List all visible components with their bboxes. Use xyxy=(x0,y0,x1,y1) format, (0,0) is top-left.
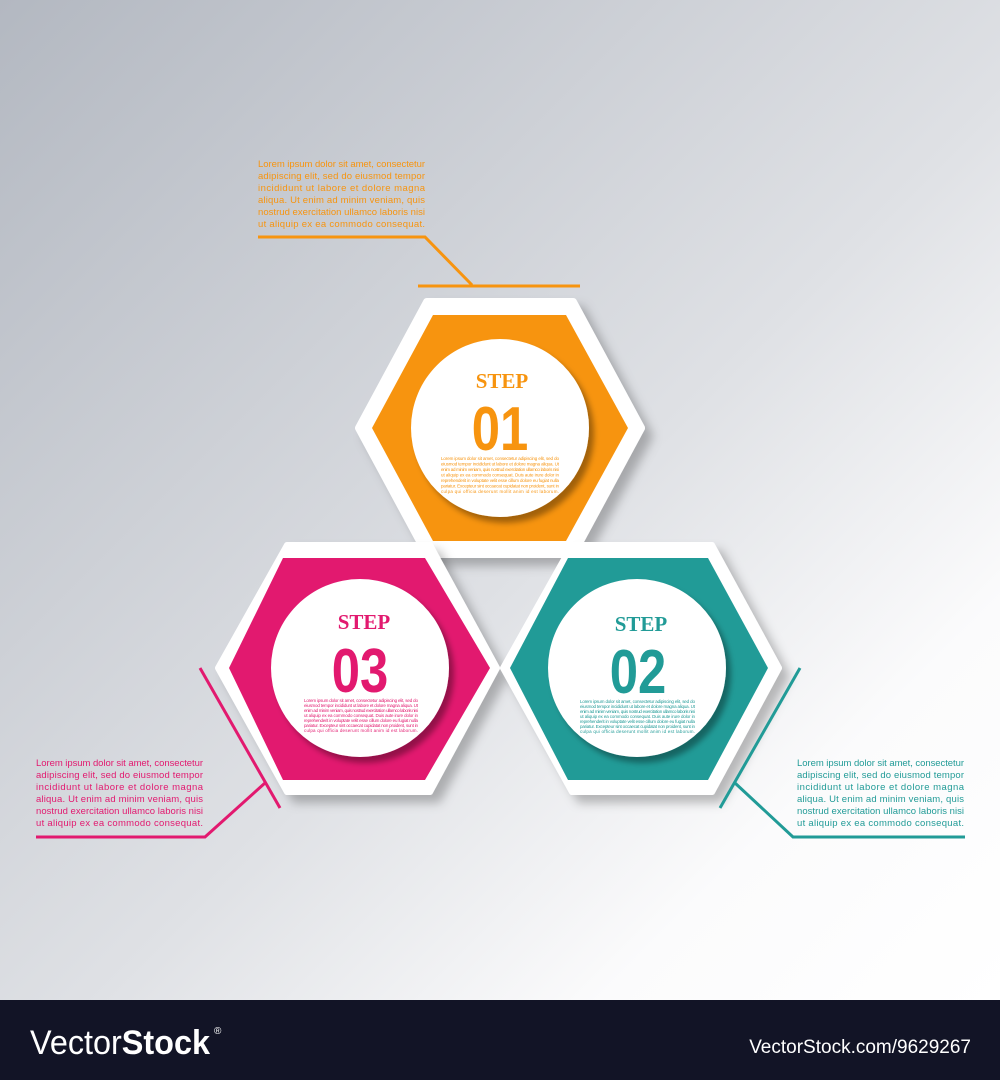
footer bar xyxy=(0,1000,1000,1080)
hexagon step 03: enim ad minim veniam, quis nostrud exercitation ullamco laboris nisi xyxy=(304,708,418,713)
hexagon step 02: Lorem ipsum dolor sit amet, consectetur adipiscing elit, sed do xyxy=(580,699,695,704)
hexagon step 02: eiusmod tempor incididunt ut labore et dolore magna aliqua. Ut xyxy=(580,704,696,709)
hexagon step 03: culpa qui officia deserunt mollit anim id est laborum. xyxy=(304,728,418,733)
callout: step 03 text and connector: aliqua. Ut enim ad minim veniam, quis xyxy=(36,794,203,805)
callout: step 02 text and connector xyxy=(720,668,965,837)
callout: step 03 text and connector: ut aliquip ex ea commodo consequat. xyxy=(36,818,203,829)
callout: step 03 text and connector: nostrud exercitation ullamco laboris nisi xyxy=(36,806,203,817)
hexagon step 01: culpa qui officia deserunt mollit anim id est laborum. xyxy=(441,489,559,494)
callout: step 02 text and connector: ut aliquip ex ea commodo consequat. xyxy=(797,818,964,829)
footer bar: ® xyxy=(214,1026,222,1037)
callout: step 02 text and connector: adipiscing elit, sed do eiusmod tempor xyxy=(797,770,964,781)
hexagon step 03: eiusmod tempor incididunt ut labore et dolore magna aliqua. Ut xyxy=(304,703,419,708)
hexagon step 02: reprehenderit in voluptate velit esse cillum dolore eu fugiat nulla xyxy=(580,719,695,724)
hexagon step 02 xyxy=(503,545,779,792)
callout: step 02 text and connector: Lorem ipsum dolor sit amet, consectetur xyxy=(797,758,964,769)
hexagon step 02: STEP xyxy=(615,612,667,636)
hexagon step 03: 03 xyxy=(332,637,388,706)
hexagon step 03: ut aliquip ex ea commodo consequat. Duis aute irure dolor in xyxy=(304,713,418,718)
hexagon step 03: reprehenderit in voluptate velit esse cillum dolore eu fugiat nulla xyxy=(304,718,418,723)
hexagon step 01: Lorem ipsum dolor sit amet, consectetur adipiscing elit, sed do xyxy=(441,456,559,461)
hexagon step 02: pariatur. Excepteur sint occaecat cupidatat non proident, sunt in xyxy=(580,724,695,729)
hexagon step 03: pariatur. Excepteur sint occaecat cupidatat non proident, sunt in xyxy=(304,723,418,728)
callout: step 02 text and connector: incididunt ut labore et dolore magna xyxy=(797,782,965,793)
callout: step 01 text and connector: incididunt ut labore et dolore magna xyxy=(258,183,426,194)
callout: step 03 text and connector: adipiscing elit, sed do eiusmod tempor xyxy=(36,770,203,781)
callout: step 03 text and connector: incididunt ut labore et dolore magna xyxy=(36,782,204,793)
hexagon step 01: pariatur. Excepteur sint occaecat cupidatat non proident, sunt in xyxy=(441,484,559,488)
hexagon step 03: STEP xyxy=(338,610,390,634)
footer bar: VectorStock.com/9629267 xyxy=(749,1037,971,1058)
callout: step 01 text and connector: adipiscing elit, sed do eiusmod tempor xyxy=(258,171,425,182)
callout: step 01 text and connector: nostrud exercitation ullamco laboris nisi xyxy=(258,207,425,218)
hexagon step 01: ut aliquip ex ea commodo consequat. Duis aute irure dolor in xyxy=(441,472,559,478)
footer bar: VectorStock xyxy=(30,1024,210,1062)
hexagon step 01: reprehenderit in voluptate velit esse cillum dolore eu fugiat nulla xyxy=(441,478,559,483)
hexagon step 01: STEP xyxy=(476,369,528,393)
hexagon step 01: eiusmod tempor incididunt ut labore et dolore magna aliqua. Ut xyxy=(441,462,560,466)
callout: step 03 text and connector: Lorem ipsum dolor sit amet, consectetur xyxy=(36,758,203,769)
hexagon step 02: culpa qui officia deserunt mollit anim id est laborum. xyxy=(580,729,695,734)
hexagon step 02: ut aliquip ex ea commodo consequat. Duis aute irure dolor in xyxy=(580,714,695,719)
hexagon step 03: Lorem ipsum dolor sit amet, consectetur adipiscing elit, sed do xyxy=(304,698,418,703)
callout: step 01 text and connector xyxy=(258,159,580,286)
callout: step 02 text and connector: nostrud exercitation ullamco laboris nisi xyxy=(797,806,964,817)
hexagon step 01: 01 xyxy=(472,395,528,464)
callout: step 03 text and connector xyxy=(36,668,280,837)
hexagon step 02: 02 xyxy=(610,638,666,707)
hexagon step 02: enim ad minim veniam, quis nostrud exercitation ullamco laboris nisi xyxy=(580,709,695,714)
callout: step 01 text and connector: ut aliquip ex ea commodo consequat. xyxy=(258,219,425,230)
callout: step 01 text and connector: Lorem ipsum dolor sit amet, consectetur xyxy=(258,159,425,170)
callout: step 02 text and connector: aliqua. Ut enim ad minim veniam, quis xyxy=(797,794,964,805)
callout: step 01 text and connector: aliqua. Ut enim ad minim veniam, quis xyxy=(258,195,425,206)
hexagon step 01: enim ad minim veniam, quis nostrud exercitation ullamco laboris nisi xyxy=(441,467,559,472)
hexagon step 01 xyxy=(359,302,641,554)
hexagon step 03 xyxy=(218,545,497,792)
